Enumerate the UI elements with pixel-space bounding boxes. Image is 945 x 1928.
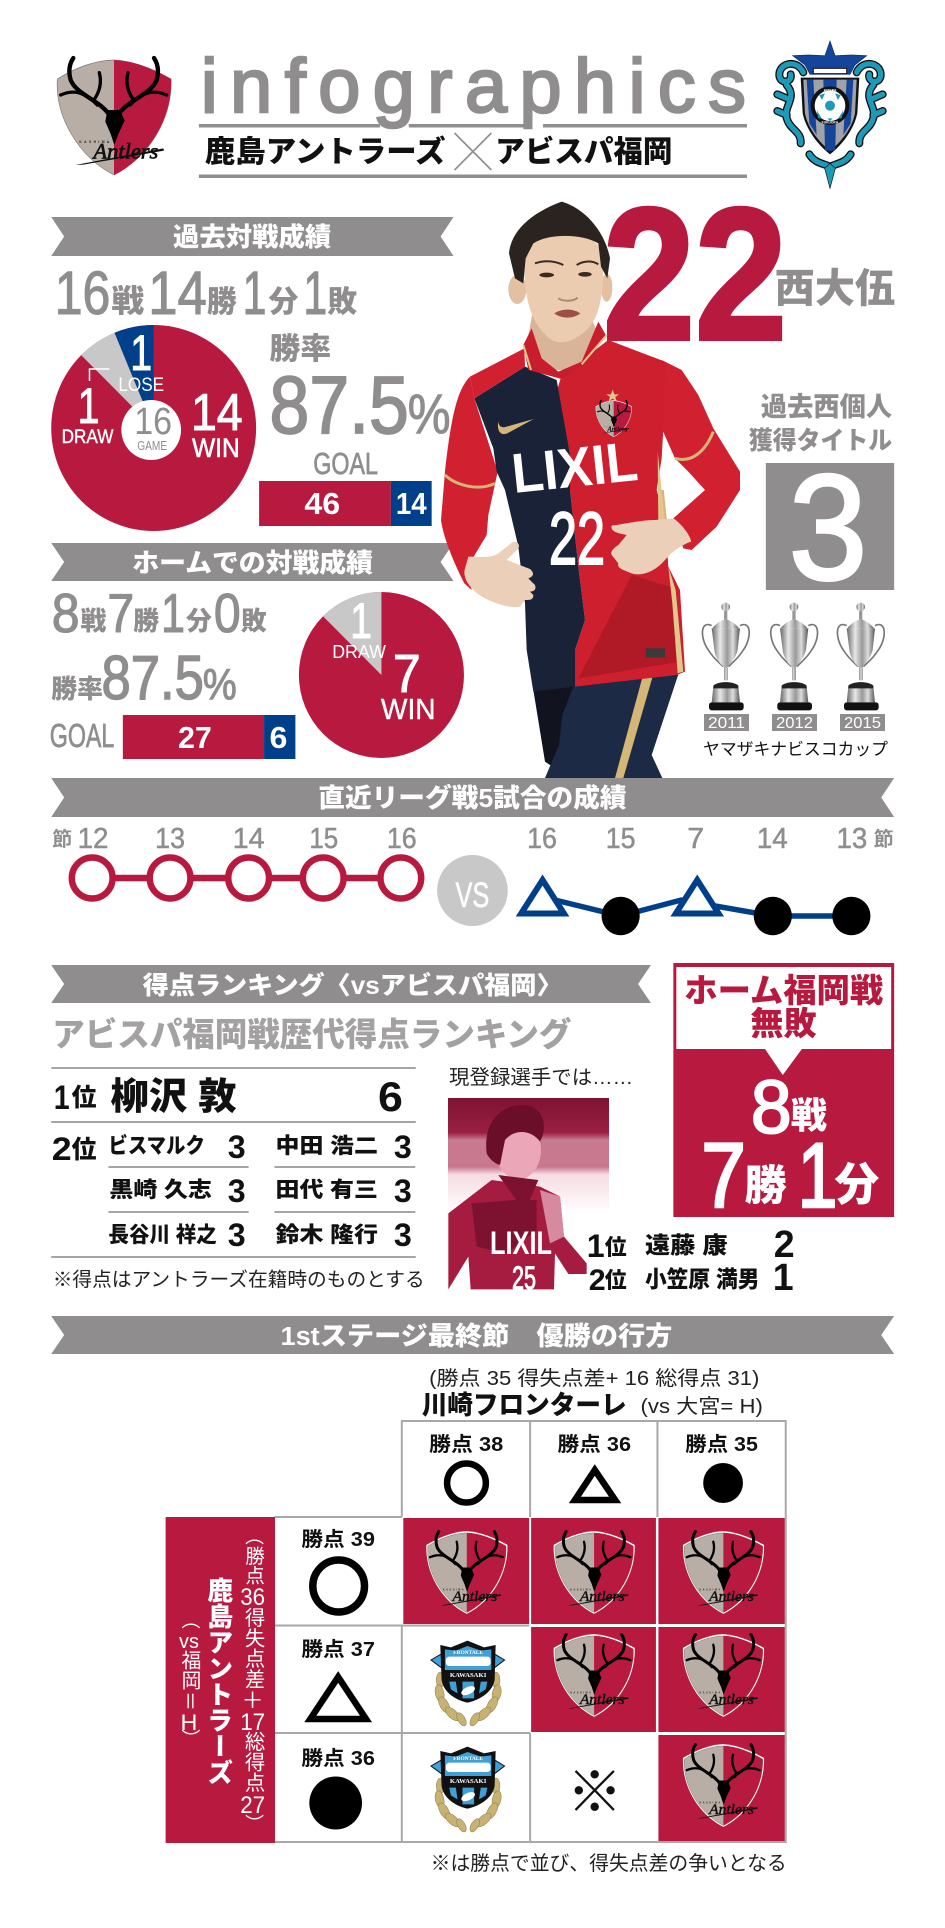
banner: past head-to-head: 過去対戦成績 <box>173 222 331 252</box>
recent form: Kashima: 14 <box>233 823 265 855</box>
list: current squad scorers: 遠藤 康 <box>645 1232 728 1258</box>
callout: unbeaten at home: 分 <box>834 1159 879 1210</box>
row label: Kashima panel: 得失点差 <box>241 1607 265 1689</box>
bar: overall goals: 14 <box>396 486 427 521</box>
rank 1 row: 1 <box>54 1079 70 1117</box>
recent form: Kashima: 12 <box>78 823 108 855</box>
header: Kawasaki Frontale: (勝点 35 得失点差+ 16 総得点 31) <box>429 1367 759 1390</box>
stat: overall win rate: 87.5 <box>270 360 409 451</box>
footnote: grid: ※は勝点で並び、得失点差の争いとなる <box>431 1852 787 1875</box>
stat: home win rate: 87.5 <box>101 644 204 713</box>
stat: overall record: 1 <box>243 259 267 327</box>
vs badge: VS <box>456 876 489 915</box>
subtitle: match-up: アビスパ福岡 <box>495 135 672 169</box>
callout: unbeaten at home: 7 <box>701 1125 746 1227</box>
stat: home win rate: % <box>203 660 237 709</box>
stat: overall win rate: % <box>408 382 451 445</box>
column: draw <box>557 1433 631 1500</box>
recent form: Kashima: 節 <box>52 828 72 851</box>
rank 1 row <box>54 1073 403 1120</box>
callout: unbeaten at home: 無敗 <box>750 1005 817 1042</box>
photo: current player duotone: 25 <box>512 1260 536 1296</box>
shirt navy half <box>474 367 585 692</box>
bar: overall goals: GOAL <box>313 446 378 481</box>
stat: overall win rate <box>270 333 451 451</box>
list: current squad scorers: 位 <box>605 1235 627 1260</box>
title: infographics: infographics <box>201 44 746 129</box>
row label: Kashima panel: ＝ <box>178 1691 200 1711</box>
cup name: ヤマザキナビスコカップ <box>703 740 888 759</box>
trophy 2015 <box>837 603 885 732</box>
column: loss <box>685 1433 758 1503</box>
player photo illustration <box>441 202 740 778</box>
stat: home record: 0 <box>214 582 241 644</box>
row: win <box>301 1528 375 1612</box>
stat: home record: 1 <box>161 582 185 644</box>
titles count box: 3 <box>789 444 867 611</box>
player name: 西大伍 <box>775 267 895 311</box>
hair <box>509 202 610 283</box>
bar: home goals: GOAL <box>50 717 114 754</box>
pie chart: home results: 1 <box>350 593 372 649</box>
stat: home record: 分 <box>186 607 212 636</box>
rank 2 rows: 長谷川 祥之 <box>108 1223 217 1247</box>
rank 2 rows: 中田 浩二 <box>276 1134 378 1158</box>
header: Kawasaki Frontale <box>422 1367 763 1420</box>
row label: Kashima panel <box>166 1517 275 1843</box>
stat: home record: 敗 <box>241 607 267 636</box>
stat: overall record <box>55 259 357 327</box>
pie chart: overall results: 14 <box>191 383 243 441</box>
row label: Kashima panel: 福岡 <box>178 1650 201 1690</box>
trophy 2015: 2015 <box>844 715 881 732</box>
stat: overall record: 1 <box>303 259 327 327</box>
pie chart: overall results: 1 <box>78 378 99 434</box>
row label: Kashima panel: H <box>181 1710 197 1735</box>
row label: Kashima panel: vs <box>179 1631 199 1653</box>
list: current squad scorers: 小笠原 満男 <box>645 1266 759 1292</box>
trophy 2012 <box>771 603 818 732</box>
row: win: 勝点 39 <box>301 1528 375 1551</box>
titles label: 過去西個人 <box>761 392 893 422</box>
bar: home goals: 27 <box>178 720 212 755</box>
list: current squad scorers: 位 <box>605 1268 627 1293</box>
list: current squad scorers: 1 <box>587 1228 605 1264</box>
rank 2 rows: 田代 有三 <box>276 1178 378 1202</box>
recent form: Kashima <box>52 823 421 898</box>
rank 2 rows: 位 <box>72 1136 97 1164</box>
column: win: 勝点 38 <box>429 1433 503 1456</box>
stat: overall record: 勝 <box>207 286 237 319</box>
row label: Kashima panel: ＋ <box>242 1688 264 1713</box>
shirt red half <box>557 340 685 687</box>
row label: Kashima panel: （ <box>242 1526 264 1545</box>
bar: home goals: 6 <box>270 720 287 755</box>
recent form: Kashima: 13 <box>155 823 185 855</box>
collar <box>523 322 607 379</box>
left hand <box>464 542 535 607</box>
recent form: Kashima: 15 <box>309 823 338 855</box>
column: loss: 勝点 35 <box>685 1433 758 1456</box>
recent form: Fukuoka: 7 <box>687 823 704 855</box>
rank 2 rows: 3 <box>228 1129 246 1165</box>
stat: overall record: 16 <box>55 259 110 327</box>
stat: overall win rate: 勝率 <box>270 333 331 366</box>
callout: unbeaten at home: 1 <box>798 1125 837 1227</box>
note: current squad: 現登録選手では…… <box>449 1066 633 1089</box>
titles label: 獲得タイトル <box>749 427 892 455</box>
banner: recent form <box>51 778 894 817</box>
face <box>524 232 603 342</box>
rank 2 rows: 3 <box>394 1129 412 1165</box>
rank 2 rows: 鈴木 隆行 <box>276 1222 378 1247</box>
list: current squad scorers <box>587 1224 795 1299</box>
pie chart: overall results: GAME <box>137 438 167 453</box>
cells: Kashima wins <box>403 1518 785 1841</box>
rank 2 rows: 3 <box>394 1217 412 1253</box>
rank 2 rows: 黒崎 久志 <box>109 1178 212 1202</box>
gold trim <box>445 432 713 523</box>
rank 1 row: 位 <box>72 1084 97 1112</box>
rank 2 rows: ビスマルク <box>108 1133 205 1158</box>
photo: current player duotone: LIXIL <box>490 1225 552 1261</box>
banner: final matchday <box>51 1316 894 1354</box>
rank 2 rows: 3 <box>228 1217 246 1253</box>
list: current squad scorers: 2 <box>774 1224 795 1266</box>
banner: scoring ranking: 得点ランキング〈vsアビスパ福岡〉 <box>143 971 562 1000</box>
recent form: Fukuoka: 14 <box>757 823 788 855</box>
column: draw: 勝点 36 <box>557 1433 631 1456</box>
row label: Kashima panel: 27 <box>240 1792 265 1819</box>
footnote: scoring ranking: ※得点はアントラーズ在籍時のものとする <box>53 1269 425 1291</box>
trophy 2011 <box>702 603 749 732</box>
rank 2 rows: 2 <box>52 1131 72 1167</box>
recent form: Fukuoka: 節 <box>874 828 894 851</box>
right hand <box>611 518 691 574</box>
row label: Kashima panel: 総得点 <box>241 1731 265 1792</box>
header: Kawasaki Frontale: 川崎フロンターレ <box>422 1391 627 1420</box>
titles count box <box>766 444 894 611</box>
stat: home record <box>52 582 267 644</box>
player photo illustration: 22 <box>549 497 605 580</box>
stat: home record: 勝 <box>133 607 159 636</box>
row label: Kashima panel: ） <box>242 1814 264 1833</box>
banner: home head-to-head: ホームでの対戦成績 <box>132 548 373 578</box>
row: loss: 勝点 36 <box>301 1747 375 1770</box>
bar: overall goals <box>259 446 432 526</box>
rank 1 row: 柳沢 敦 <box>110 1076 237 1117</box>
bar: home goals <box>50 715 295 759</box>
stat: home record: 8 <box>52 582 80 644</box>
sleeve patch <box>646 648 665 658</box>
trophy 2012: 2012 <box>776 715 813 732</box>
table: all-time scorers <box>51 1068 416 1257</box>
neck <box>528 308 598 370</box>
subtitle: match-up: 鹿島アントラーズ <box>205 135 446 169</box>
banner: scoring ranking <box>51 965 651 1003</box>
player number 22: 22 <box>603 169 787 379</box>
left sleeve <box>441 377 498 590</box>
row label: Kashima panel: 鹿島アントラーズ <box>204 1577 233 1785</box>
stat: home record: 7 <box>107 582 134 644</box>
stat: home record: 戦 <box>81 607 107 636</box>
heading: all-time ranking: アビスパ福岡戦歴代得点ランキング <box>52 1016 571 1053</box>
recent form: Fukuoka <box>521 823 894 935</box>
banner: past head-to-head <box>51 217 454 256</box>
titles label <box>749 392 893 455</box>
rank 2 rows <box>52 1129 412 1253</box>
row: loss <box>301 1747 375 1830</box>
cell: goal difference decides: ※ <box>567 1761 623 1824</box>
pie chart: overall results: 16 <box>134 401 172 443</box>
row label: Kashima panel: （ <box>179 1610 200 1629</box>
callout: unbeaten at home: ホーム福岡戦 <box>684 972 883 1009</box>
navy undershorts <box>533 685 575 768</box>
shorts <box>545 674 678 778</box>
cells: Kawasaki wins <box>431 1641 505 1834</box>
stat: home win rate <box>51 644 237 713</box>
recent form: Fukuoka: 13 <box>836 823 867 855</box>
recent form: Fukuoka: 16 <box>527 823 557 855</box>
subtitle: match-up <box>199 133 747 178</box>
pie chart: overall results: DRAW <box>62 427 113 448</box>
recent form: Fukuoka: 15 <box>606 823 636 855</box>
row label: Kashima panel: ） <box>179 1729 200 1748</box>
column: win <box>429 1433 503 1502</box>
stat: overall record: 敗 <box>327 286 357 319</box>
nike swoosh <box>498 419 534 434</box>
jersey star <box>606 390 619 401</box>
pie chart: home results: WIN <box>381 694 436 726</box>
banner: home head-to-head <box>51 543 454 581</box>
banner: final matchday: 1stステージ最終節 優勝の行方 <box>280 1321 672 1351</box>
row: draw: 勝点 37 <box>301 1638 375 1661</box>
pie chart: overall results: 1 <box>130 325 152 381</box>
stat: overall record: 分 <box>269 286 298 319</box>
rank 1 row: 6 <box>378 1073 403 1120</box>
crest: Kashima Antlers <box>55 57 173 177</box>
brows, eyes, nose, mouth <box>535 261 598 265</box>
right sleeve <box>662 360 740 550</box>
shoulder <box>470 348 525 398</box>
row label: Kashima panel: 36 <box>240 1584 265 1611</box>
pie chart: home results: 7 <box>393 644 421 704</box>
stat: overall record: 14 <box>148 259 207 327</box>
photo: current player duotone <box>448 1098 609 1296</box>
bar: overall goals: 46 <box>304 486 340 521</box>
callout: unbeaten at home: 勝 <box>744 1162 787 1209</box>
scenario grid <box>166 1421 786 1843</box>
row label: Kashima panel: 勝点 <box>242 1546 264 1585</box>
stat: overall record: 戦 <box>111 284 144 319</box>
callout: unbeaten at home: 戦 <box>791 1096 827 1136</box>
row: draw <box>301 1638 375 1719</box>
pie chart: home results <box>299 592 464 758</box>
callout: unbeaten at home <box>673 963 894 1227</box>
pie chart: overall results: WIN <box>192 433 240 463</box>
rank 2 rows: 3 <box>394 1173 412 1209</box>
pie chart: overall results <box>51 325 256 531</box>
crest: Avispa Fukuoka <box>777 41 883 188</box>
player photo illustration: LIXIL <box>509 429 641 505</box>
header: Kawasaki Frontale: (vs 大宮= H) <box>641 1395 763 1418</box>
pie chart: overall results: LOSE <box>118 375 164 396</box>
list: current squad scorers: 1 <box>773 1257 794 1299</box>
banner: recent form: 直近リーグ戦5試合の成績 <box>318 783 627 813</box>
row label: Kashima panel: 17 <box>240 1709 265 1736</box>
rank 2 rows: 3 <box>228 1173 246 1209</box>
trophy 2011: 2011 <box>708 715 745 732</box>
callout: unbeaten at home: 8 <box>751 1065 792 1149</box>
ears <box>508 275 526 304</box>
stat: home win rate: 勝率 <box>51 675 103 704</box>
list: current squad scorers: 2 <box>589 1264 606 1297</box>
pie chart: home results: DRAW <box>332 642 386 662</box>
trophies <box>702 603 888 759</box>
vs badge <box>437 855 508 926</box>
recent form: Kashima: 16 <box>387 823 417 855</box>
